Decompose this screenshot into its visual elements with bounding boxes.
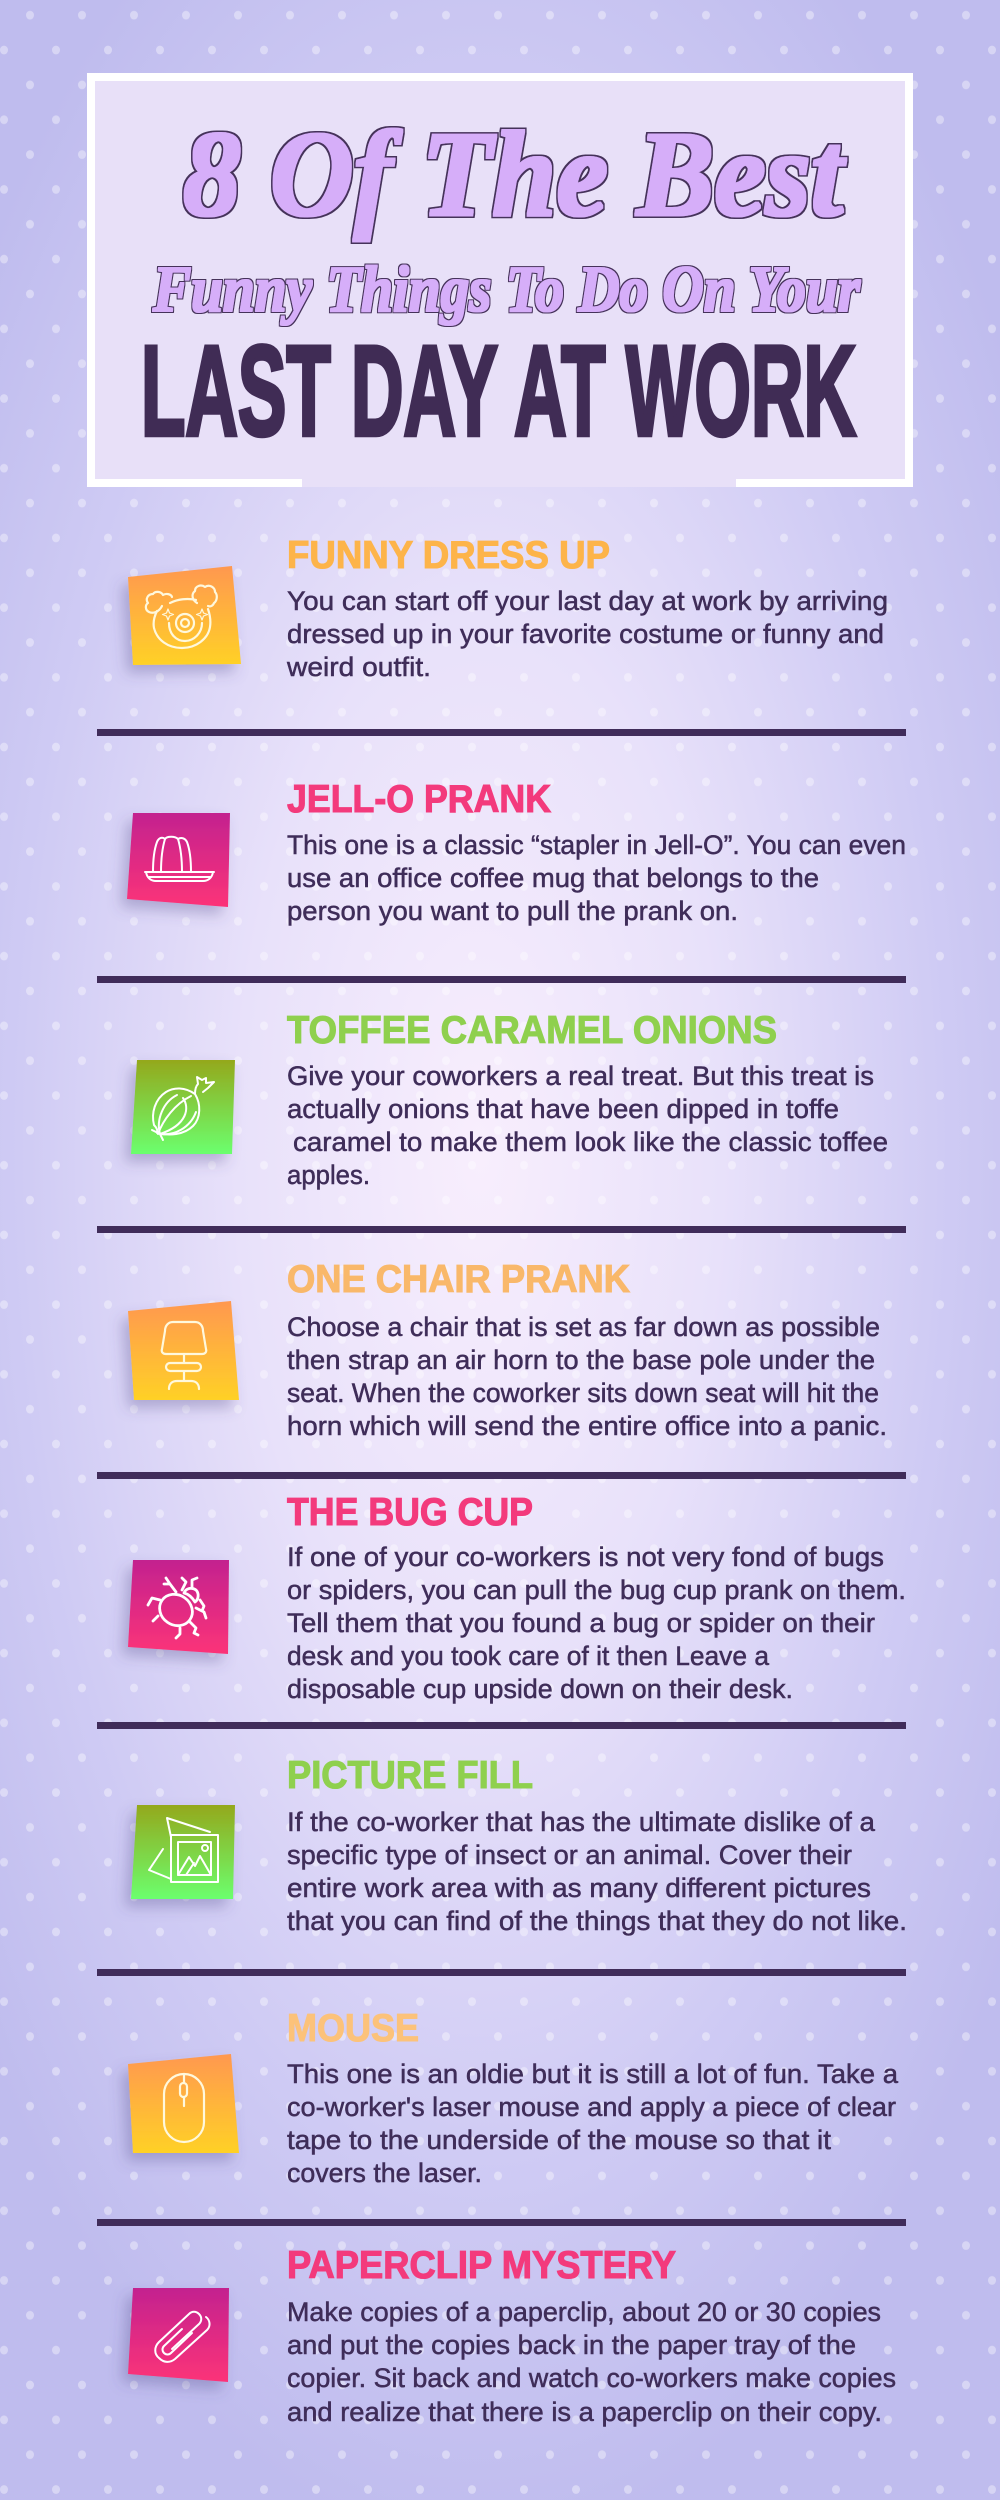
body text: or spiders, you can pull the bug cup prank on them. [287, 1575, 906, 1605]
body text: tape to the underside of the mouse so that it [287, 2125, 832, 2155]
panel: one chair prank [128, 1258, 887, 1441]
icon: paperclip sticky note [128, 2288, 229, 2382]
body text: disposable cup upside down on their desk. [287, 1674, 793, 1704]
body text: covers the laser. [287, 2158, 482, 2188]
panel: mouse [128, 2007, 899, 2188]
icon: onion sticky note [131, 1060, 235, 1154]
body text: person you want to pull the prank on. [287, 896, 738, 926]
icon: mouse sticky note [128, 2054, 239, 2153]
icon: bug sticky note [128, 1560, 229, 1654]
body text [287, 830, 906, 926]
body text [286, 586, 888, 682]
body text: apples. [287, 1160, 370, 1190]
body text: co-worker's laser mouse and apply a piece of clear [287, 2092, 896, 2122]
body text: If the co-worker that has the ultimate dislike of a [287, 1807, 876, 1837]
body text: actually onions that have been dipped in toffe [287, 1094, 839, 1124]
heading: PICTURE FILL [287, 1754, 533, 1797]
body text: copier. Sit back and watch co-workers make copies [287, 2363, 896, 2393]
panel: funny dress up [128, 534, 888, 682]
heading: FUNNY DRESS UP [287, 534, 610, 577]
subtitle: Funny Things To Do On Your: Funny Things To Do On Your [152, 253, 861, 326]
body text: horn which will send the entire office into a panic. [287, 1411, 887, 1441]
body text: caramel to make them look like the classic toffee [293, 1127, 888, 1157]
panel: paperclip mystery [128, 2244, 896, 2427]
body text [287, 1542, 906, 1704]
body text: seat. When the coworker sits down seat will hit the [287, 1378, 879, 1408]
body text: dressed up in your favorite costume or funny and [287, 619, 884, 649]
body text: and put the copies back in the paper tray of the [287, 2330, 856, 2360]
body text: Make copies of a paperclip, about 20 or 30 copies [287, 2297, 881, 2327]
body text: desk and you took care of it then Leave a [287, 1641, 770, 1671]
body text: You can start off your last day at work by arriving [287, 586, 888, 616]
body text [287, 1061, 888, 1190]
body text: use an office coffee mug that belongs to the [287, 863, 819, 893]
panel: toffee caramel onions [131, 1009, 888, 1190]
body text: Give your coworkers a real treat. But this treat is [287, 1061, 874, 1091]
heading: JELL-O PRANK [287, 778, 551, 821]
icon: jelly sticky note [127, 813, 230, 907]
heading: ONE CHAIR PRANK [287, 1258, 630, 1301]
body text: This one is a classic “stapler in Jell-O”. You can even [287, 830, 906, 860]
separator lines [97, 729, 906, 2226]
icon: chair sticky note [128, 1301, 239, 1400]
body text [287, 1312, 887, 1441]
panel: the bug cup [128, 1491, 906, 1704]
heading: TOFFEE CARAMEL ONIONS [287, 1009, 777, 1052]
heading: MOUSE [287, 2007, 419, 2050]
body text: Choose a chair that is set as far down as possible [287, 1312, 880, 1342]
panel: picture fill [131, 1754, 907, 1936]
body text: and realize that there is a paperclip on their copy. [287, 2397, 882, 2427]
header panel [87, 73, 913, 487]
icon: clown sticky note [128, 566, 241, 665]
panel: jell-o prank [127, 778, 906, 926]
body text: If one of your co-workers is not very fond of bugs [287, 1542, 884, 1572]
body text: then strap an air horn to the base pole under the [287, 1345, 875, 1375]
title: 8 Of The Best: 8 Of The Best [183, 107, 846, 242]
body text: weird outfit. [286, 652, 431, 682]
body text: entire work area with as many different pictures [287, 1873, 871, 1903]
heading: PAPERCLIP MYSTERY [287, 2244, 676, 2287]
body text [287, 1807, 907, 1936]
icon: pictures sticky note [131, 1805, 235, 1899]
heading: THE BUG CUP [287, 1491, 533, 1534]
body text [287, 2297, 896, 2427]
body text: that you can find of the things that they do not like. [287, 1906, 907, 1936]
body text: Tell them that you found a bug or spider on their [287, 1608, 875, 1638]
body text: specific type of insect or an animal. Cover their [287, 1840, 852, 1870]
body text: This one is an oldie but it is still a lot of fun. Take a [287, 2059, 899, 2089]
body text [287, 2059, 899, 2188]
